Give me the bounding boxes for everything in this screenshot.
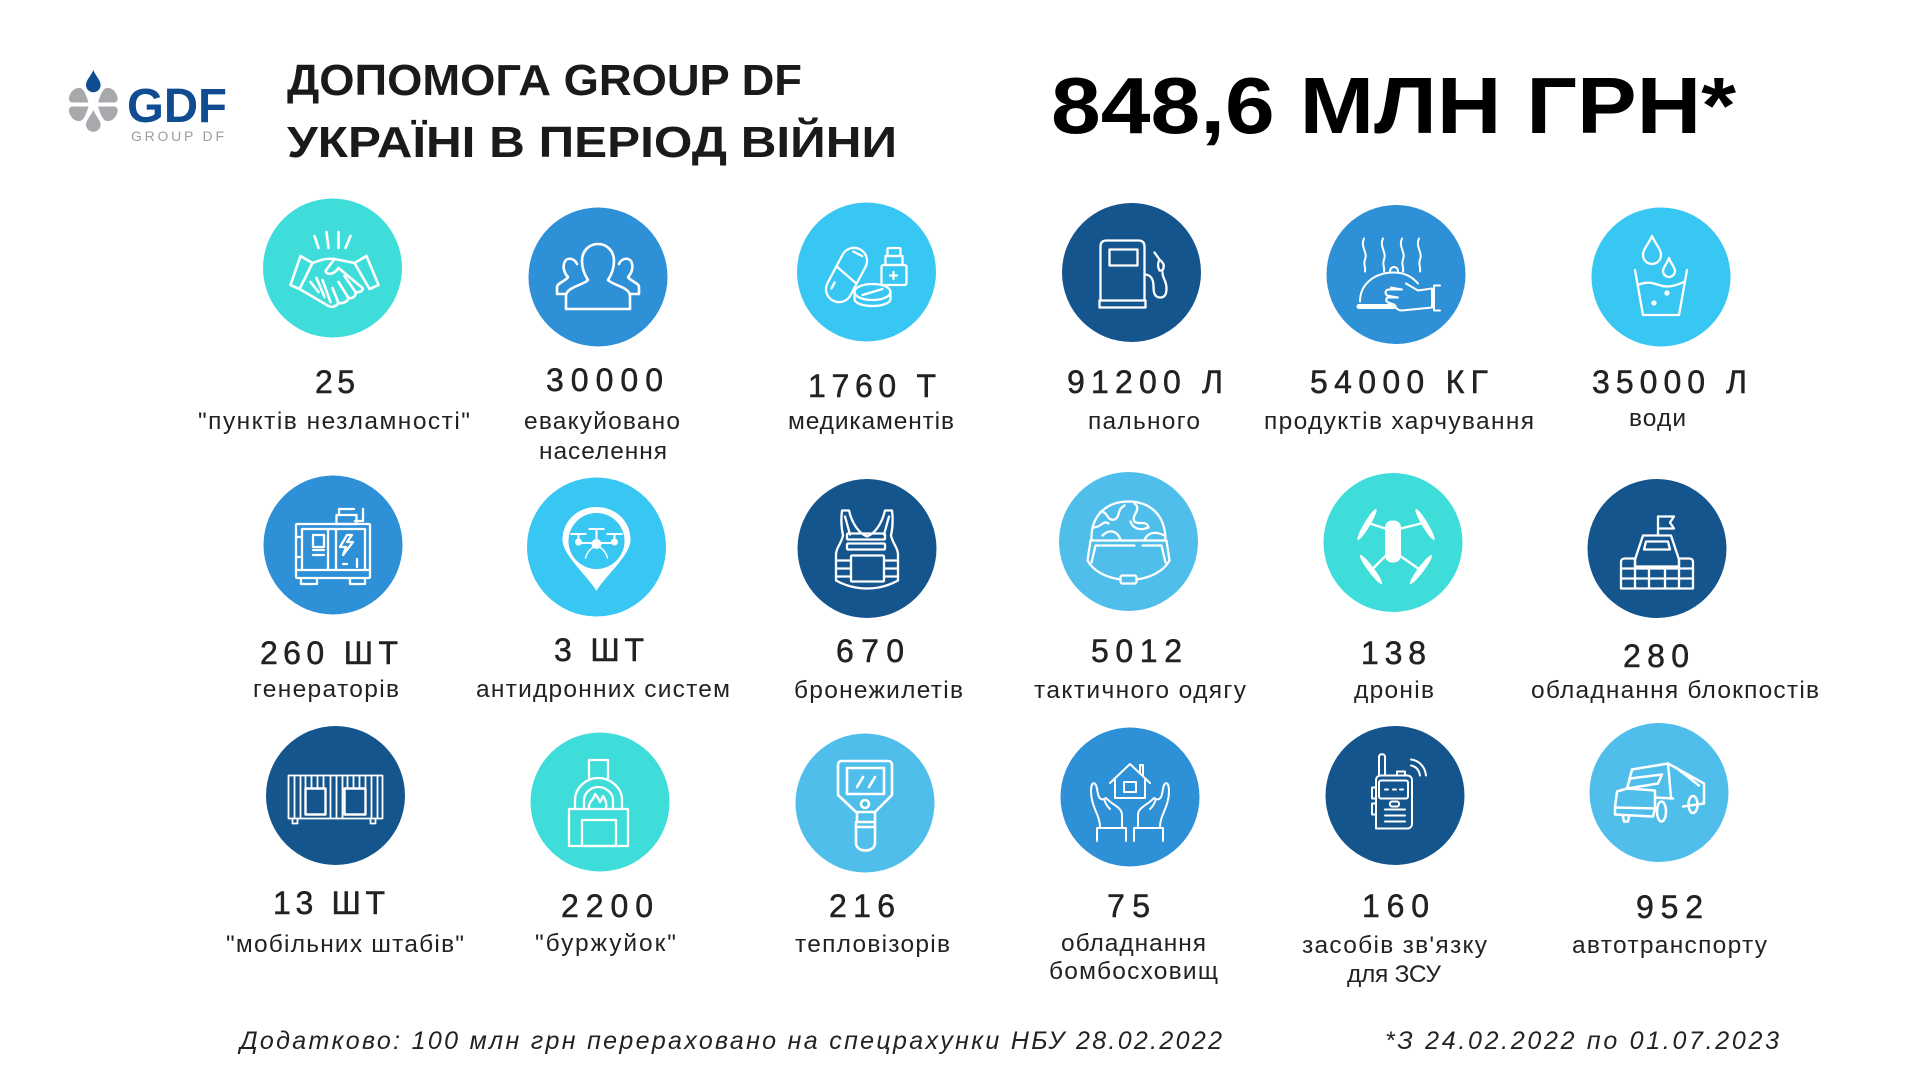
number: 1760 Т: [808, 368, 936, 404]
icon: mobile container: [266, 726, 405, 865]
icon: fuel pump: [1062, 203, 1201, 342]
icon: checkpoint: [1588, 479, 1726, 618]
item: бронежилети: [794, 479, 963, 704]
number: 670: [836, 633, 904, 669]
label: засобів зв'язку: [1302, 932, 1488, 959]
icon: generator: [264, 476, 402, 614]
number: 3 ШТ: [554, 632, 644, 668]
label: бомбосховищ: [1049, 958, 1218, 985]
logo: GDF: [69, 70, 227, 144]
logo: GDF: GROUP DF: [131, 128, 224, 144]
label: [1302, 932, 1488, 988]
item: обладнання блокпостів: [1531, 479, 1819, 704]
label: "буржуйок": [535, 930, 676, 957]
item: вода: [1592, 208, 1747, 432]
icon: pills: [797, 202, 936, 342]
icon: drone pin: [527, 478, 666, 616]
label: автотранспорту: [1572, 932, 1768, 959]
number: 160: [1362, 888, 1429, 924]
label: тепловізорів: [795, 931, 950, 958]
number: 260 ШТ: [260, 635, 398, 671]
label: евакуйовано: [524, 408, 680, 435]
label: для ЗСУ: [1347, 961, 1441, 988]
number: 13 ШТ: [273, 885, 385, 921]
icon: hands holding house: [1060, 728, 1200, 866]
title: [287, 56, 897, 167]
label: пального: [1088, 408, 1200, 435]
label: генераторів: [253, 676, 399, 703]
icon: helmet: [1059, 472, 1198, 611]
label: дронів: [1354, 677, 1434, 704]
number: 91200 Л: [1067, 364, 1223, 400]
icon: food cloche: [1326, 205, 1466, 344]
title: ДОПОМОГА GROUP DF: [287, 56, 802, 105]
number: 952: [1636, 889, 1703, 925]
label: [1049, 930, 1218, 985]
label: населення: [539, 438, 667, 465]
number: 216: [829, 888, 895, 924]
total amount: 848,6 МЛН ГРН*: [1051, 61, 1737, 150]
item: засоби зв'язку: [1302, 726, 1488, 988]
footnote: period: *З 24.02.2022 по 01.07.2023: [1385, 1027, 1779, 1055]
footnote: additional: Додатково: 100 млн грн перераховано на спецрахунки НБУ 28.02.2022: [237, 1027, 1222, 1055]
item: тактичний одяг: [1034, 472, 1247, 704]
number: 2200: [561, 888, 653, 924]
item: медикаменти: [788, 202, 954, 435]
item: тепловізори: [795, 734, 950, 958]
label: бронежилетів: [794, 677, 963, 704]
number: 25: [315, 364, 355, 400]
icon: radio: [1326, 726, 1464, 865]
number: 75: [1107, 888, 1150, 924]
number: 54000 КГ: [1310, 364, 1488, 400]
number: 280: [1623, 638, 1689, 674]
icon: water glass: [1592, 208, 1730, 346]
icon: thermal imager: [796, 734, 934, 872]
label: "пунктів незламності": [198, 408, 470, 435]
number: 5012: [1091, 633, 1182, 669]
item: пальне: [1062, 203, 1223, 435]
number: 138: [1361, 635, 1426, 671]
label: обладнання блокпостів: [1531, 677, 1819, 704]
icon: armor vest: [798, 479, 936, 618]
item: евакуйовано населення: [524, 208, 680, 465]
item: продукти харчування: [1264, 205, 1534, 435]
label: "мобільних штабів": [226, 931, 464, 958]
title: УКРАЇНІ В ПЕРІОД ВІЙНИ: [287, 116, 897, 167]
icon: people: [528, 208, 668, 346]
label: медикаментів: [788, 408, 954, 435]
label: обладнання: [1061, 930, 1206, 957]
logo: GDF: GDF: [127, 80, 227, 133]
number: 35000 Л: [1592, 364, 1747, 400]
label: продуктів харчування: [1264, 408, 1534, 435]
number: 30000: [546, 362, 663, 398]
label: води: [1629, 405, 1686, 432]
item: антидронні системи: [476, 478, 730, 703]
label: антидронних систем: [476, 676, 730, 703]
icon: truck: [1590, 723, 1728, 862]
label: [524, 408, 680, 465]
item: генератори: [253, 476, 402, 703]
item: мобільні штаби: [226, 726, 464, 958]
icon: stove: [530, 732, 670, 872]
icon: quadcopter: [1324, 473, 1462, 612]
icon: handshake: [263, 198, 402, 338]
item: автотранспорт: [1572, 723, 1768, 959]
item: дрони: [1324, 473, 1462, 704]
item: буржуйки: [530, 732, 676, 957]
item: обладнання бомбосховищ: [1049, 728, 1218, 985]
item: пункти незламності: [198, 198, 470, 435]
label: тактичного одягу: [1034, 677, 1247, 704]
